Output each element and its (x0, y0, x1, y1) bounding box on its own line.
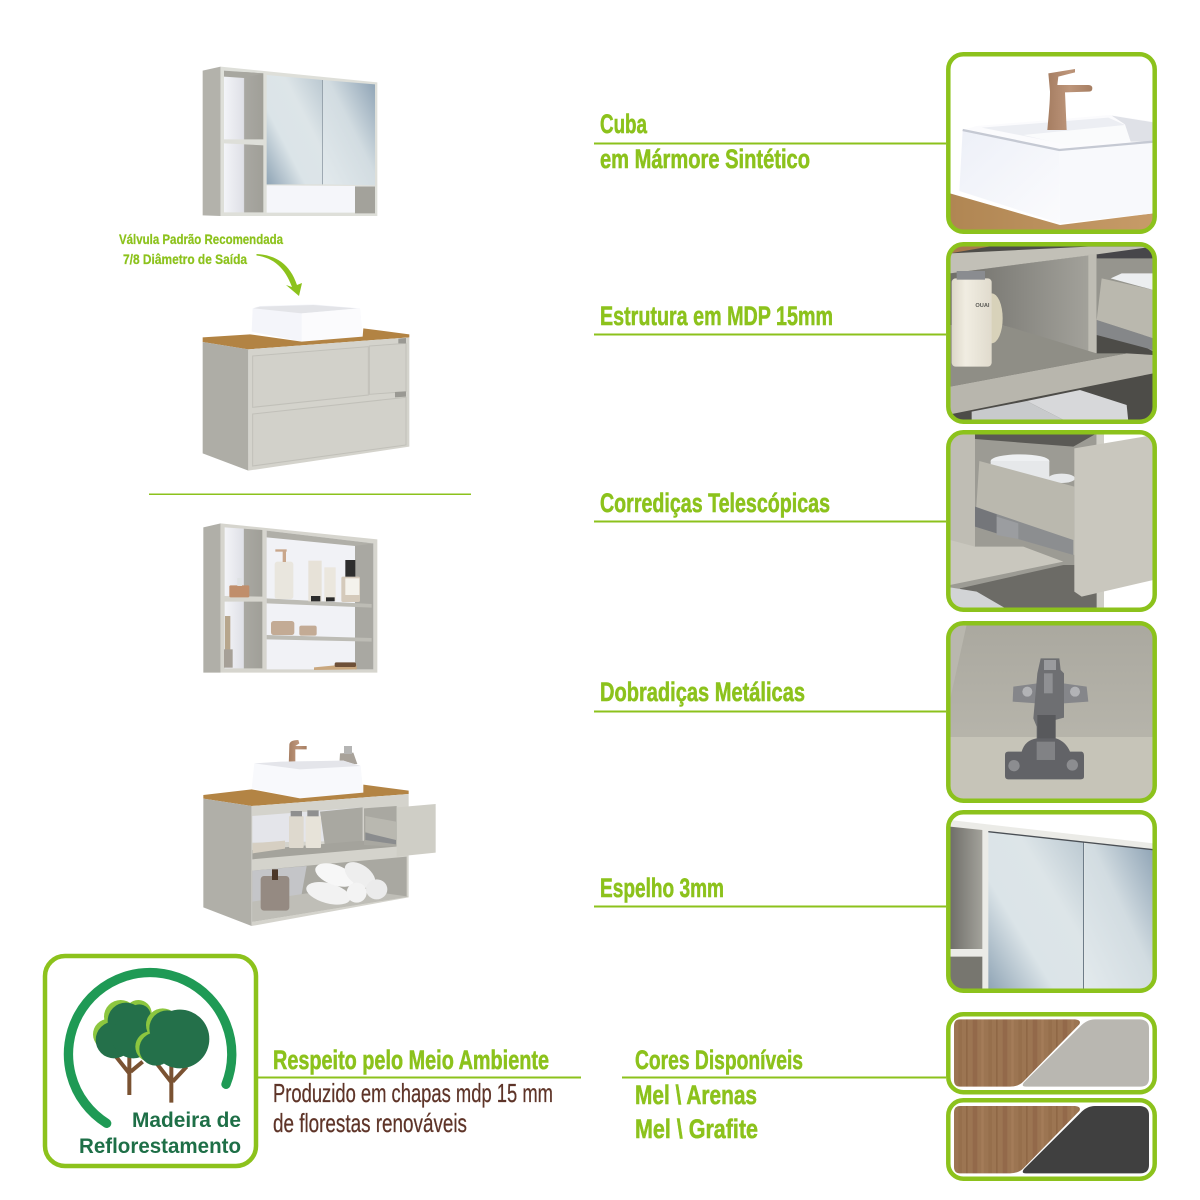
product: open vanity with basin (203, 740, 436, 926)
divider line between product views (149, 494, 471, 495)
swatch: honey and sand (948, 1014, 1155, 1092)
shelf objects (224, 549, 360, 670)
panel: mirror detail (946, 810, 1157, 993)
color names (635, 1080, 758, 1144)
product: closed vanity with basin (203, 304, 409, 471)
color names: Mel \ Grafite (635, 1114, 758, 1144)
valve label: 7/8 Diâmetro de Saída (123, 251, 247, 267)
connector line (594, 334, 946, 336)
valve label (119, 231, 283, 267)
heading: hinges: Dobradiças Metálicas (600, 677, 805, 707)
connector line (594, 710, 946, 712)
badge arc (68, 973, 232, 1123)
bottle brand: OUAI (975, 303, 990, 309)
icon: two trees (93, 1000, 209, 1103)
panel: basin detail (946, 52, 1157, 234)
valve label: Válvula Padrão Recomendada (119, 231, 283, 247)
connector line (258, 1076, 581, 1078)
badge text: Madeira de (132, 1109, 241, 1132)
panel: structure detail (946, 242, 1157, 424)
badge text: Reflorestamento (79, 1135, 241, 1158)
connector line (594, 906, 946, 908)
description (273, 1078, 553, 1138)
heading: mirror: Espelho 3mm (600, 873, 724, 903)
connector line (594, 142, 946, 144)
connector line (594, 520, 946, 522)
heading: basin: Cuba (600, 109, 648, 139)
text block: environment (258, 1045, 581, 1138)
heading: slides: Corrediças Telescópicas (600, 488, 830, 518)
panel: hinge detail (946, 621, 1157, 803)
badge: reforestation wood (45, 956, 256, 1166)
arrow: to basin valve (256, 254, 302, 296)
vanity objects (253, 810, 387, 911)
callout: Cuba (594, 109, 946, 174)
heading: environment: Respeito pelo Meio Ambiente (273, 1045, 549, 1075)
heading: basin: em Mármore Sintético (600, 144, 810, 174)
description: de florestas renováveis (273, 1108, 467, 1138)
product: open shelf cabinet (203, 523, 377, 673)
product: closed mirror cabinet (203, 67, 377, 216)
badge text (79, 1109, 241, 1158)
callout: recommended valve (119, 231, 302, 296)
panel: telescopic slide detail (946, 430, 1157, 612)
connector line (622, 1076, 946, 1078)
heading: basin (600, 109, 810, 174)
description: Produzido em chapas mdp 15 mm (273, 1078, 553, 1108)
color names: Mel \ Arenas (635, 1080, 757, 1110)
heading: colors: Cores Disponíveis (635, 1045, 803, 1075)
swatch: honey and graphite (948, 1100, 1155, 1179)
heading: structure: Estrutura em MDP 15mm (600, 301, 833, 331)
text block: available colors (622, 1045, 946, 1144)
